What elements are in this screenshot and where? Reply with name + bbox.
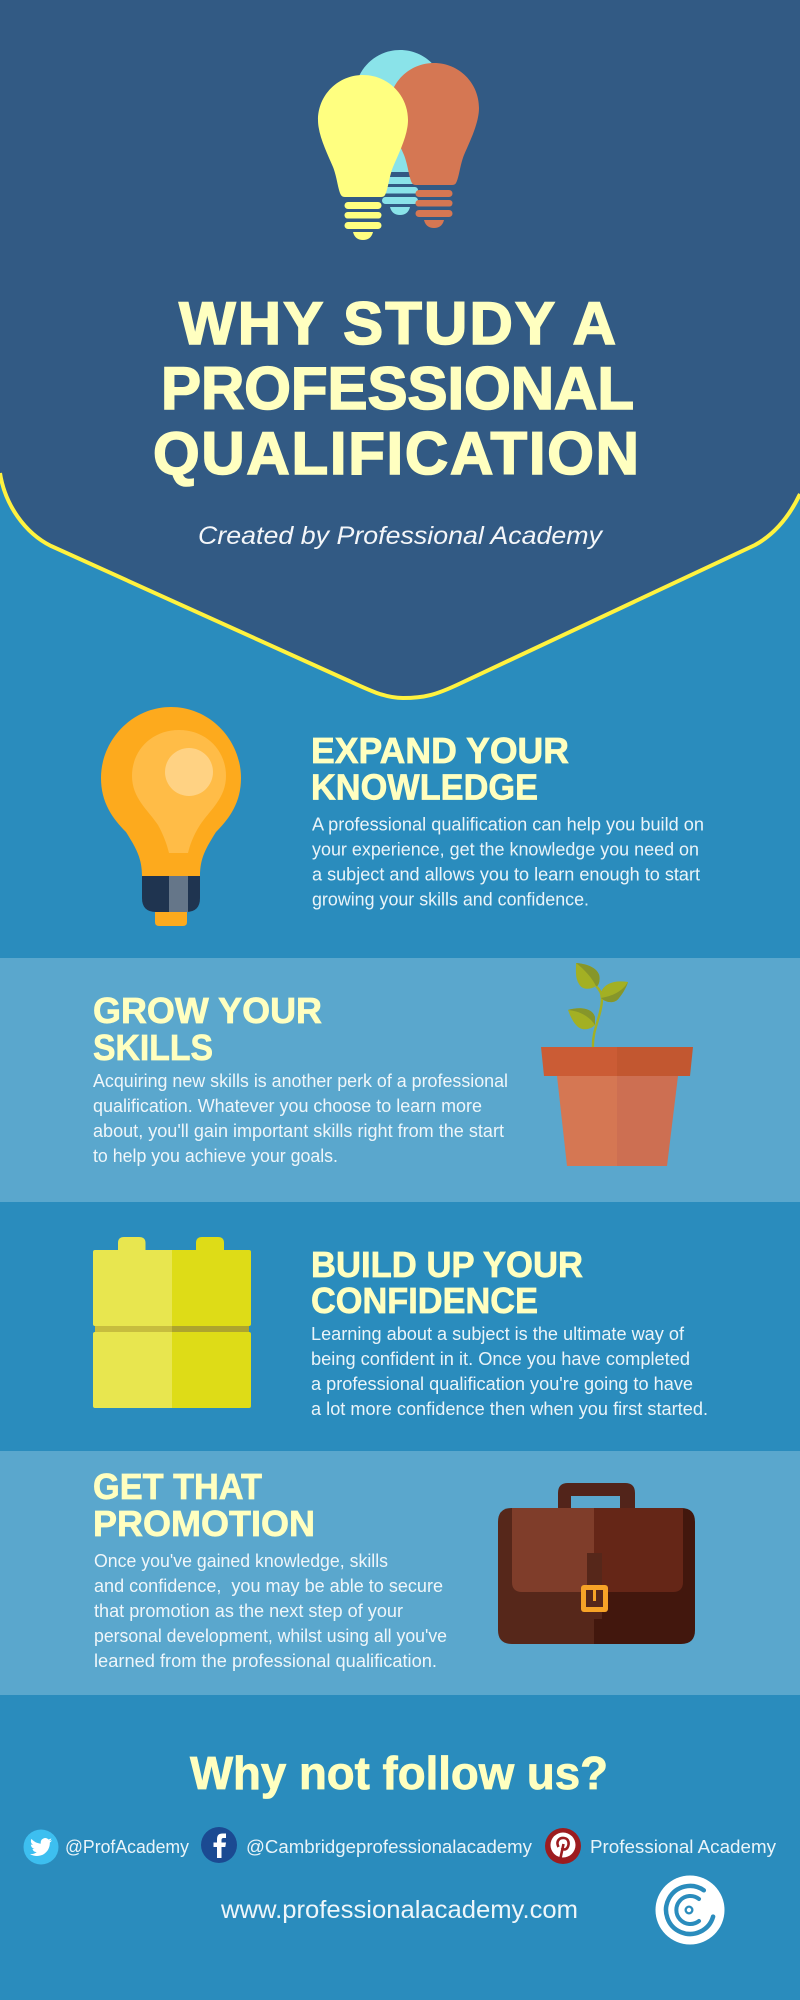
- title: PROFESSIONAL: [161, 355, 634, 422]
- heading: SKILLS: [93, 1027, 213, 1068]
- body text: qualification. Whatever you choose to learn more: [93, 1096, 482, 1116]
- title: QUALIFICATION: [153, 420, 639, 487]
- icon: plant pot: [541, 963, 693, 1166]
- body text: about, you'll gain important skills right from the start: [93, 1121, 504, 1141]
- heading: CONFIDENCE: [311, 1280, 538, 1321]
- body text: to help you achieve your goals.: [93, 1146, 338, 1166]
- icon: twitter: [24, 1830, 58, 1864]
- icon: orange light bulb: [101, 707, 241, 926]
- heading: [311, 730, 569, 808]
- header yellow outline: [0, 473, 800, 698]
- handle: @ProfAcademy: [65, 1837, 189, 1857]
- band: [0, 958, 800, 1202]
- icon: yellow bulb: [318, 75, 408, 240]
- icon: cyan bulb: [355, 50, 445, 215]
- body text: a subject and allows you to learn enough to start: [312, 864, 700, 884]
- icon: facebook: [201, 1827, 237, 1863]
- panel: footer: [24, 1747, 776, 1944]
- icon: orange bulb: [389, 63, 479, 228]
- social: twitter: [24, 1830, 189, 1864]
- heading: [93, 990, 322, 1068]
- body text: learned from the professional qualification.: [94, 1651, 437, 1671]
- body text: being confident in it. Once you have completed: [311, 1349, 690, 1369]
- body text: growing your skills and confidence.: [312, 890, 589, 910]
- body text: [93, 1071, 508, 1166]
- body text: and confidence, you may be able to secure: [94, 1576, 443, 1596]
- icon: briefcase: [498, 1483, 695, 1644]
- panel: get that promotion: [0, 1451, 800, 1695]
- handle: @Cambridgeprofessionalacademy: [246, 1837, 532, 1857]
- heading: [311, 1244, 583, 1321]
- body text: [312, 814, 704, 910]
- social: pinterest: [545, 1828, 776, 1864]
- body text: [311, 1324, 708, 1419]
- logo: [656, 1876, 724, 1944]
- website url: www.professionalacademy.com: [220, 1896, 578, 1924]
- body text: Acquiring new skills is another perk of a professional: [93, 1071, 508, 1091]
- heading: EXPAND YOUR: [311, 730, 569, 771]
- title: WHY STUDY A: [179, 290, 616, 357]
- icon: three light bulbs: [318, 50, 479, 240]
- header shape: [0, 0, 800, 698]
- heading: BUILD UP YOUR: [311, 1244, 583, 1285]
- band: [0, 1451, 800, 1695]
- heading: why not follow us: Why not follow us?: [190, 1747, 608, 1799]
- heading: GET THAT: [93, 1466, 262, 1507]
- body text: your experience, get the knowledge you need on: [312, 840, 699, 860]
- icon: building blocks: [93, 1237, 251, 1408]
- panel: build up your confidence: [93, 1237, 708, 1419]
- body text: personal development, whilst using all you've: [94, 1626, 447, 1646]
- heading: KNOWLEDGE: [311, 766, 538, 808]
- title: [153, 290, 639, 487]
- body text: that promotion as the next step of your: [94, 1601, 403, 1621]
- heading: GROW YOUR: [93, 990, 322, 1031]
- body text: [94, 1551, 447, 1671]
- body text: Once you've gained knowledge, skills: [94, 1551, 388, 1571]
- heading: PROMOTION: [93, 1503, 315, 1544]
- subtitle: Created by Professional Academy: [198, 522, 604, 550]
- social: facebook: [201, 1827, 532, 1863]
- body text: a lot more confidence then when you first started.: [311, 1399, 708, 1419]
- icon: pinterest: [545, 1828, 581, 1864]
- body text: a professional qualification you're going to have: [311, 1374, 693, 1394]
- body text: Learning about a subject is the ultimate way of: [311, 1324, 685, 1344]
- handle: Professional Academy: [590, 1837, 776, 1857]
- heading: [93, 1466, 315, 1544]
- body text: A professional qualification can help you build on: [312, 814, 704, 834]
- panel: header: [0, 0, 800, 698]
- panel: grow your skills: [0, 958, 800, 1202]
- panel: expand your knowledge: [101, 707, 704, 926]
